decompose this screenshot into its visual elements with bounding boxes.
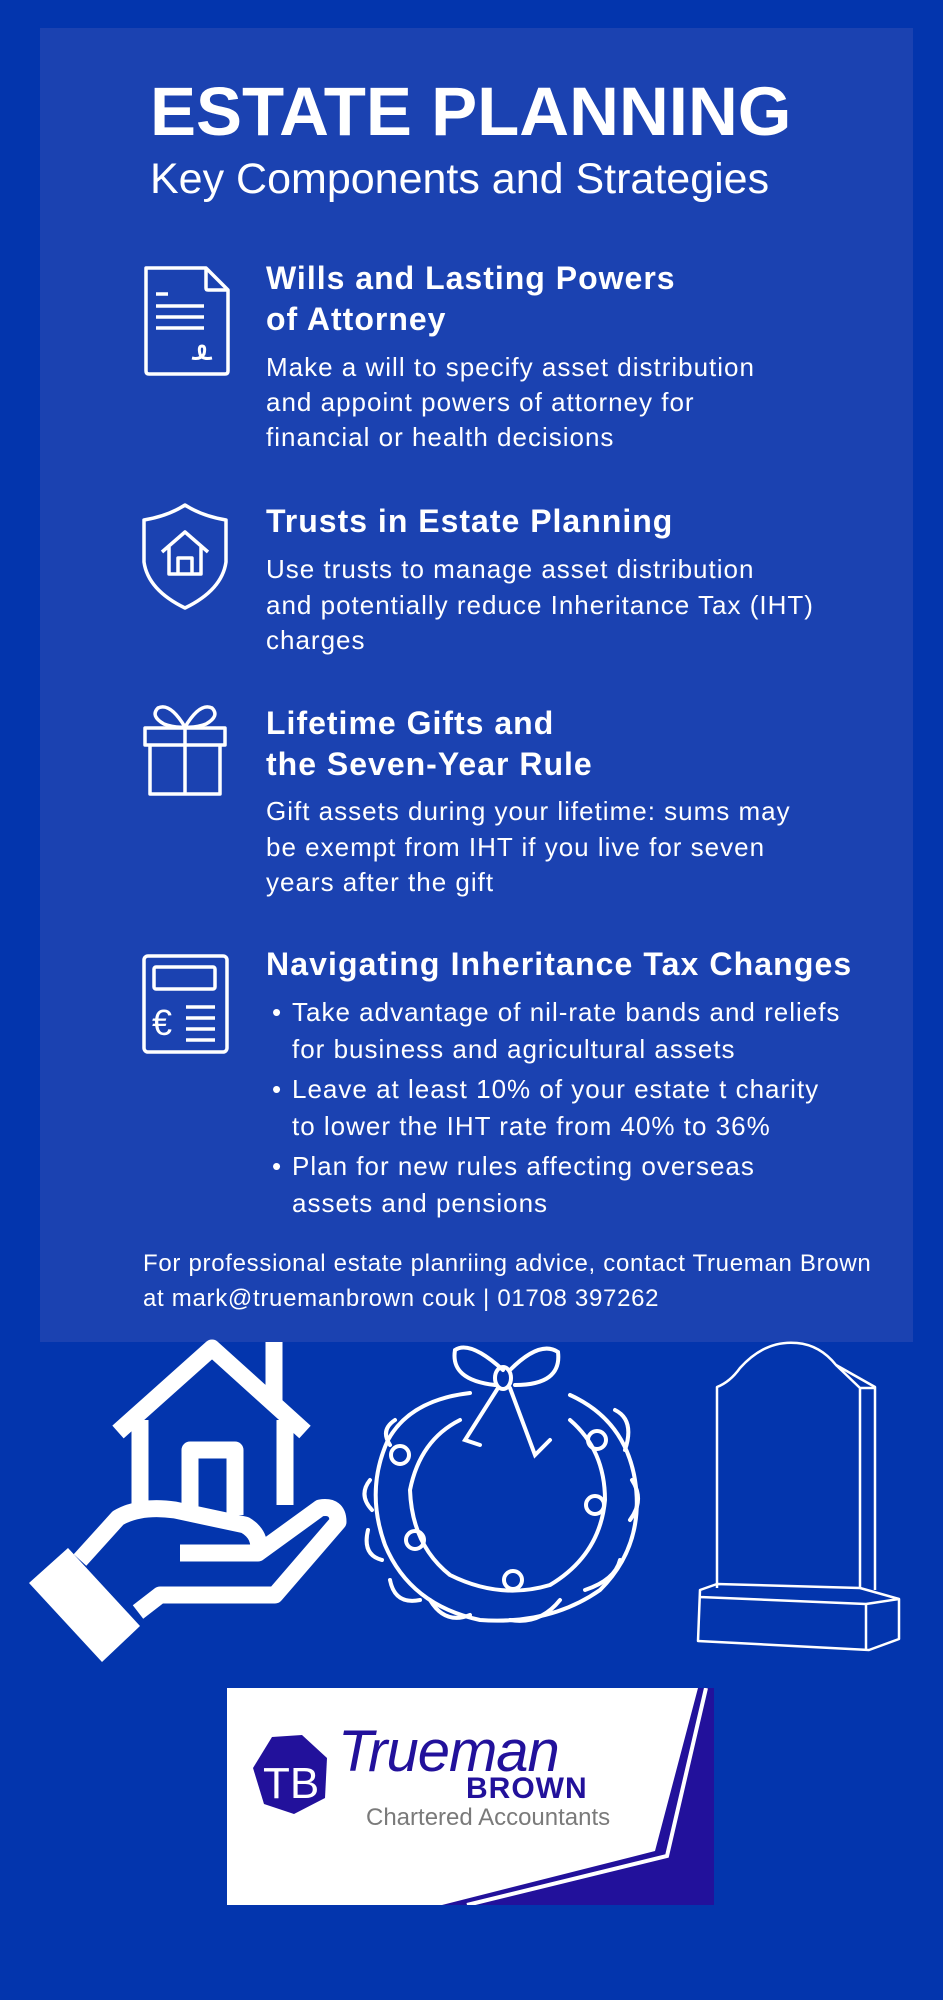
bullet 1: for business and agricultural assets [292, 1034, 736, 1064]
bullet list: • [272, 1074, 282, 1104]
panel: main content [40, 28, 913, 1342]
text: trusts: Use trusts to manage asset distribution [266, 554, 754, 584]
text: wills: Make a will to specify asset distribution [266, 352, 755, 382]
logo mark: TB hexagon [253, 1735, 327, 1814]
icon: calculator [142, 954, 229, 1054]
icon: document [144, 266, 230, 376]
title: ESTATE PLANNING [150, 73, 791, 150]
heading: trusts: Trusts in Estate Planning [266, 503, 673, 539]
bullet list: • [272, 997, 282, 1027]
text: wills: financial or health decisions [266, 422, 614, 452]
heading: gifts [266, 705, 593, 782]
bullet 2: Leave at least 10% of your estate t charity [292, 1074, 819, 1104]
text: trusts [266, 554, 814, 655]
logo: Trueman Brown [227, 1688, 714, 1905]
footer contact text: at mark@truemanbrown couk | 01708 397262 [143, 1285, 659, 1312]
bullet list: • [272, 1151, 282, 1181]
logo: Trueman Brown: Trueman [338, 1719, 559, 1784]
bullet 3: Plan for new rules affecting overseas [292, 1151, 755, 1181]
subtitle: Key Components and Strategies [150, 155, 769, 203]
footer contact text [143, 1250, 871, 1312]
bullet 2: to lower the IHT rate from 40% to 36% [292, 1111, 771, 1141]
text: trusts: charges [266, 625, 366, 655]
icon: gift [143, 705, 227, 796]
bullet 3 [272, 1151, 755, 1218]
bullet 2 [272, 1074, 819, 1141]
icon: shield house [142, 503, 228, 610]
heading: inheritance tax: Navigating Inheritance Tax Changes [266, 946, 852, 982]
logo: Trueman Brown: Chartered Accountants [366, 1804, 610, 1831]
text: gifts [266, 796, 791, 897]
text: gifts: years after the gift [266, 867, 494, 897]
section: wills [144, 266, 230, 376]
heading: wills [266, 260, 676, 337]
text: gifts: be exempt from IHT if you live for seven [266, 832, 765, 862]
logo mark: TB hexagon: TB [263, 1759, 319, 1808]
icon: calculator: € [152, 1002, 172, 1043]
heading: wills: Wills and Lasting Powers [266, 260, 676, 296]
heading: gifts: Lifetime Gifts and [266, 705, 554, 741]
text: wills: and appoint powers of attorney for [266, 387, 695, 417]
text: wills [266, 352, 755, 452]
text: trusts: and potentially reduce Inheritance Tax (IHT) [266, 590, 814, 620]
heading: gifts: the Seven-Year Rule [266, 746, 593, 782]
footer contact text: For professional estate planriing advice, contact Trueman Brown [143, 1250, 871, 1277]
logo: Trueman Brown: BROWN [466, 1772, 588, 1805]
text: gifts: Gift assets during your lifetime: sums may [266, 796, 791, 826]
bullet list [272, 997, 840, 1218]
bullet 3: assets and pensions [292, 1188, 548, 1218]
heading: wills: of Attorney [266, 301, 446, 337]
bullet 1 [272, 997, 840, 1064]
bullet 1: Take advantage of nil-rate bands and reliefs [292, 997, 840, 1027]
